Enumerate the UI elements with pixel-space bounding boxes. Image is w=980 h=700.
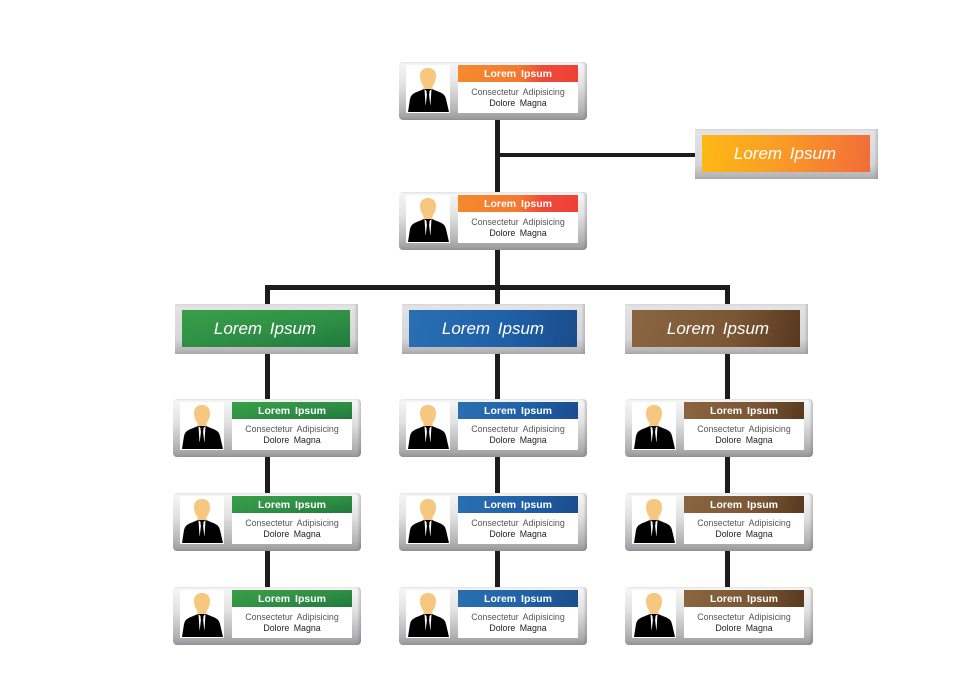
label: Lorem Ipsum [734, 144, 836, 163]
title bar: Lorem Ipsum [710, 593, 778, 605]
icon: person [406, 65, 450, 113]
text block [458, 513, 578, 544]
connector: top trunk [494, 118, 500, 194]
icon: person [180, 496, 224, 544]
title bar [458, 195, 578, 212]
label: Lorem Ipsum [214, 319, 316, 338]
title bar [458, 65, 578, 82]
title bar: Lorem Ipsum [484, 499, 552, 511]
text block: Dolore Magna [715, 528, 773, 538]
title bar: Lorem Ipsum [258, 405, 326, 417]
text block: Dolore Magna [489, 434, 547, 444]
title bar: Lorem Ipsum [484, 68, 552, 80]
card: top executive [399, 62, 587, 120]
department box: green [175, 304, 358, 354]
title bar: Lorem Ipsum [484, 593, 552, 605]
text block: Dolore Magna [489, 528, 547, 538]
department box: blue [402, 304, 585, 354]
text block: Consectetur Adipisicing [471, 612, 565, 622]
icon: person [632, 590, 676, 638]
department box: brown [625, 304, 808, 354]
card: brown 3 [625, 587, 813, 645]
text block: Dolore Magna [263, 434, 321, 444]
text block: Dolore Magna [489, 228, 547, 238]
connector: right column [725, 352, 730, 588]
text block: Dolore Magna [489, 98, 547, 108]
text block: Consectetur Adipisicing [697, 518, 791, 528]
label [182, 310, 350, 347]
text block: Dolore Magna [489, 622, 547, 632]
label: Lorem Ipsum [442, 319, 544, 338]
icon: person [632, 402, 676, 450]
text block: Consectetur Adipisicing [245, 612, 339, 622]
text block [458, 212, 578, 243]
side box: orange [695, 129, 878, 179]
text block: Consectetur Adipisicing [471, 216, 565, 226]
connector: left column [265, 352, 270, 588]
text block: Consectetur Adipisicing [697, 612, 791, 622]
connector: left drop [265, 285, 270, 306]
card: brown 2 [625, 493, 813, 551]
icon: person [406, 590, 450, 638]
title bar: Lorem Ipsum [484, 405, 552, 417]
connector: lower trunk [494, 248, 500, 306]
title bar [458, 590, 578, 607]
card: second executive [399, 192, 587, 250]
label: Lorem Ipsum [667, 319, 769, 338]
title bar: Lorem Ipsum [258, 499, 326, 511]
title bar [684, 590, 804, 607]
connector: middle column [494, 352, 500, 588]
icon: person [632, 496, 676, 544]
icon: person [180, 590, 224, 638]
text block [232, 513, 352, 544]
text block: Consectetur Adipisicing [697, 424, 791, 434]
title bar [232, 496, 352, 513]
text block: Dolore Magna [715, 622, 773, 632]
icon: person [406, 195, 450, 243]
connector: branch to side box [497, 153, 695, 157]
text block [232, 607, 352, 638]
connector: horizontal bus [265, 285, 730, 290]
icon: person [406, 402, 450, 450]
connector: right drop [725, 285, 730, 306]
text block: Consectetur Adipisicing [245, 518, 339, 528]
label [702, 135, 870, 172]
text block: Consectetur Adipisicing [245, 424, 339, 434]
text block [684, 607, 804, 638]
card: blue 3 [399, 587, 587, 645]
card: green 2 [173, 493, 361, 551]
text block [458, 82, 578, 113]
text block: Consectetur Adipisicing [471, 86, 565, 96]
text block: Dolore Magna [263, 622, 321, 632]
title bar [684, 496, 804, 513]
text block [458, 419, 578, 450]
label [632, 310, 800, 347]
title bar [458, 402, 578, 419]
card: green 3 [173, 587, 361, 645]
card: blue 1 [399, 399, 587, 457]
text block [458, 607, 578, 638]
card: green 1 [173, 399, 361, 457]
text block [232, 419, 352, 450]
title bar [232, 402, 352, 419]
text block: Dolore Magna [715, 434, 773, 444]
text block: Consectetur Adipisicing [471, 424, 565, 434]
text block [684, 419, 804, 450]
card: blue 2 [399, 493, 587, 551]
title bar: Lorem Ipsum [258, 593, 326, 605]
title bar: Lorem Ipsum [710, 499, 778, 511]
title bar [232, 590, 352, 607]
text block [684, 513, 804, 544]
icon: person [180, 402, 224, 450]
card: brown 1 [625, 399, 813, 457]
title bar [684, 402, 804, 419]
label [409, 310, 577, 347]
title bar: Lorem Ipsum [484, 198, 552, 210]
title bar: Lorem Ipsum [710, 405, 778, 417]
title bar [458, 496, 578, 513]
icon: person [406, 496, 450, 544]
text block: Dolore Magna [263, 528, 321, 538]
text block: Consectetur Adipisicing [471, 518, 565, 528]
